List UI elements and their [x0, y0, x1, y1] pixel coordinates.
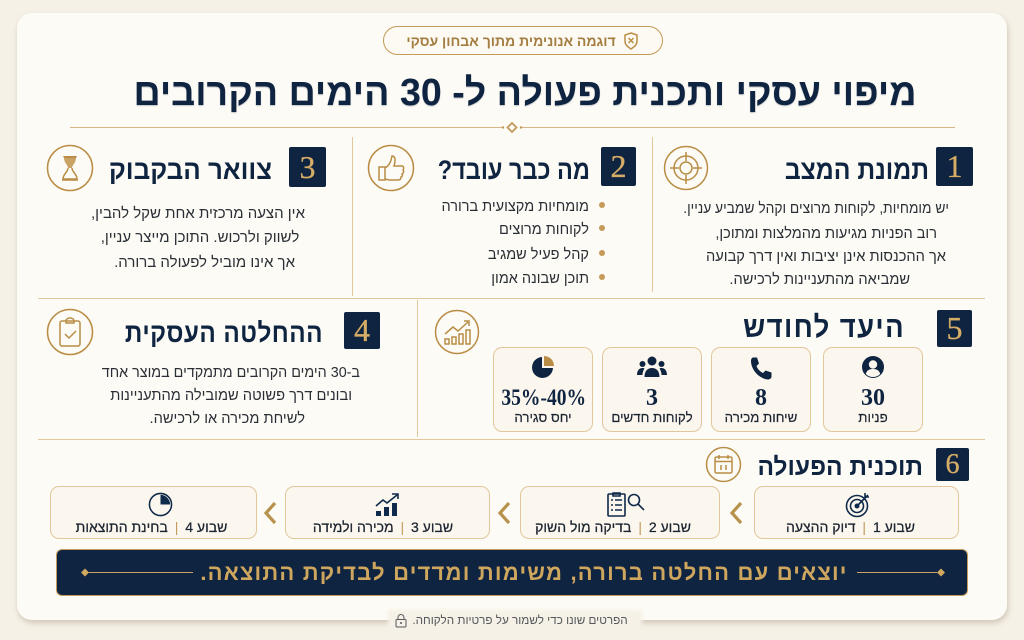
situation text: אך ההכנסות אינן יציבות ואין דרך קבועה	[706, 248, 946, 265]
heading: bottleneck: צוואר הבקבוק	[109, 155, 272, 185]
number 1	[936, 147, 973, 186]
title divider	[70, 122, 955, 134]
week 1 label: שבוע 1 | דיוק ההצעה	[786, 519, 915, 535]
decision text: ב-30 הימים הקרובים מתמקדים במוצר אחד	[102, 364, 360, 381]
panel: situation	[664, 146, 973, 288]
decision text: לשיחת מכירה או לרכישה.	[150, 410, 305, 427]
number 3	[289, 147, 326, 187]
icon: calendar	[706, 446, 742, 482]
icon: bullseye	[846, 493, 869, 518]
icon: growth chart	[434, 310, 480, 354]
icon: lock	[396, 614, 406, 628]
number 4	[344, 312, 380, 349]
stat: closing rate: יחס סגירה	[514, 410, 572, 425]
number 2	[601, 147, 636, 186]
number 6	[936, 448, 969, 481]
panel: bottleneck	[46, 144, 326, 271]
icon: target	[664, 146, 708, 190]
bullet list	[441, 198, 605, 287]
banner text: יוצאים עם החלטה ברורה, משימות ומדדים לבדיקת התוצאה.	[200, 560, 848, 585]
icon: hourglass	[46, 144, 94, 192]
week 1 card	[754, 486, 959, 539]
icon: shield	[624, 32, 638, 50]
week 3 label: שבוע 3 | מכירה ולמידה	[313, 519, 453, 535]
bottleneck text: לשווק ולרכוש. התוכן מייצר עניין,	[101, 229, 299, 246]
icon: pie progress	[148, 492, 172, 516]
stat: closing rate: 35%-40%	[501, 385, 586, 410]
heading: monthly goal: היעד לחודש	[743, 311, 905, 344]
week 4 label: שבוע 4 | בחינת התוצאות	[76, 519, 227, 535]
badge pill	[383, 26, 663, 55]
arrow 1	[730, 502, 742, 524]
stat: new clients	[602, 347, 702, 432]
icon: bar chart	[376, 493, 399, 516]
icon: checklist and magnifier	[607, 492, 644, 517]
panel: monthly goal	[434, 310, 972, 432]
heading: decision: ההחלטה העסקית	[125, 318, 323, 348]
situation text	[683, 200, 949, 288]
arrow 2	[498, 502, 510, 524]
heading: what works: מה כבר עובד?	[438, 155, 590, 185]
stat: closing rate	[493, 347, 593, 432]
situation text: שמביאה מהתעניינות לרכישה.	[729, 271, 910, 288]
stat: new clients: לקוחות חדשים	[611, 410, 693, 425]
stat: new clients: 3	[646, 385, 658, 411]
bullet list: מומחיות מקצועית ברורה	[441, 198, 589, 215]
panel: action plan heading	[706, 446, 969, 482]
panel: decision	[46, 308, 380, 427]
situation text: רוב הפניות מגיעות מהמלצות ומתוכן,	[715, 225, 937, 242]
stat: sales calls	[711, 347, 811, 432]
decision text: ובונים דרך פשוטה שמובילה מהתעניינות	[110, 387, 352, 404]
bottleneck text: אין הצעה מרכזית אחת שקל להבין,	[91, 205, 305, 222]
panel: what works	[368, 144, 636, 287]
number 5	[937, 310, 972, 347]
conclusion banner	[56, 549, 968, 596]
week 3 card	[285, 486, 490, 539]
badge text: דוגמה אנונימית מתוך אבחון עסקי	[406, 33, 616, 49]
bottleneck text	[91, 205, 305, 271]
footer text: הפרטים שונו כדי לשמור על פרטיות הלקוחה.	[412, 614, 628, 627]
number 5: 5	[946, 310, 962, 346]
number 4: 4	[354, 312, 370, 348]
title: מיפוי עסקי ותכנית פעולה ל- 30 הימים הקרובים	[134, 71, 916, 113]
bottleneck text: אך אינו מוביל לפעולה ברורה.	[114, 254, 295, 271]
stat: inquiries: 30	[861, 385, 885, 411]
number 2: 2	[610, 148, 626, 184]
stat: sales calls: 8	[755, 385, 767, 411]
week 4 card	[50, 486, 257, 539]
situation text: יש מומחיות, לקוחות מרוצים וקהל שמביע עניין.	[683, 200, 949, 217]
number 6: 6	[946, 448, 960, 480]
icon: thumbs up	[368, 144, 414, 192]
stat: inquiries: פניות	[858, 410, 888, 425]
week 2 label: שבוע 2 | בדיקה מול השוק	[535, 519, 691, 535]
bullet list: לקוחות מרוצים	[499, 221, 589, 238]
bullet list: תוכן שבונה אמון	[491, 270, 589, 287]
decision text	[102, 364, 360, 427]
footer note	[390, 612, 640, 630]
banner ornaments	[81, 568, 945, 576]
arrow 3	[264, 502, 276, 524]
stat: sales calls: שיחות מכירה	[725, 410, 797, 425]
icon: clipboard	[46, 308, 94, 356]
stat: inquiries	[823, 347, 923, 432]
heading: action plan: תוכנית הפעולה	[757, 453, 923, 481]
number 3: 3	[300, 148, 316, 184]
week 2 card	[520, 486, 720, 539]
number 1: 1	[946, 148, 962, 184]
heading: situation: תמונת המצב	[785, 155, 929, 185]
bullet list: קהל פעיל שמגיב	[488, 246, 589, 263]
